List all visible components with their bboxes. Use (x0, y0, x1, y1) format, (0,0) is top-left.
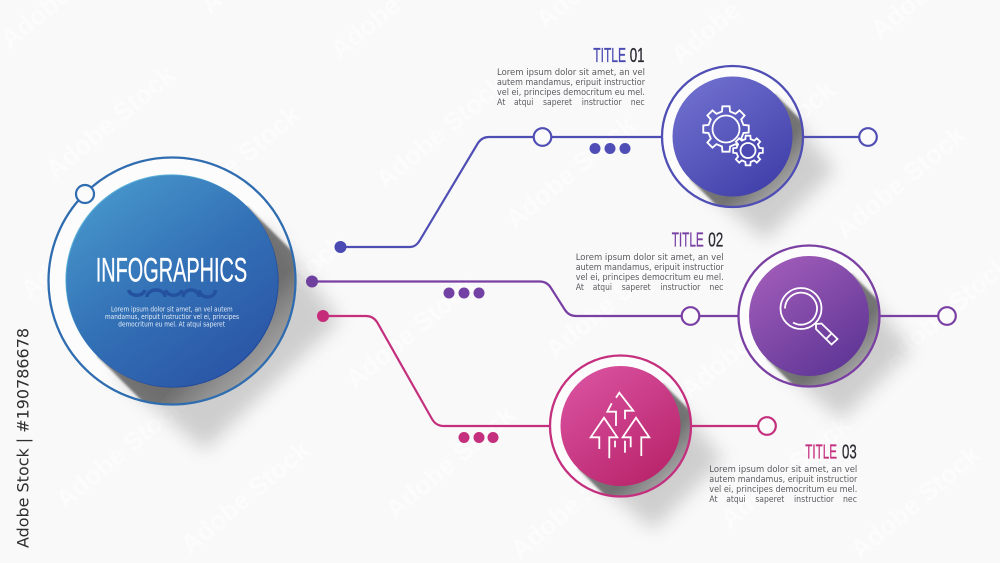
text block 02: saperet (622, 283, 651, 293)
text block 02: vel ei, principes democritum eu mel. (576, 273, 724, 283)
connector line 02 (312, 282, 939, 316)
text block 02: autem mandamus, eripuit instructior (576, 263, 724, 273)
text block 01: atqui (514, 98, 533, 108)
watermark pattern: Adobe Stock (370, 69, 511, 195)
text block 01: autem mandamus, eripuit instructior (497, 78, 645, 88)
title 02: 02 (708, 230, 723, 252)
watermark pattern: Adobe Stock (340, 269, 481, 395)
watermark pattern: Adobe Stock (210, 229, 351, 355)
text block 02 (576, 253, 724, 293)
text block 03: instructior (794, 495, 834, 505)
main body text: Lorem ipsum dolor sit amet, an vel autem (111, 306, 233, 314)
main heading: INFOGRAPHICS (96, 252, 247, 290)
title 01: TITLE (593, 45, 626, 67)
watermark pattern: Adobe Stock (675, 279, 816, 405)
text block 02: nec (709, 283, 724, 293)
text block 01: instructior (582, 98, 622, 108)
long shadow: circle 01 (689, 93, 802, 206)
watermark pattern: Adobe Stock (830, 119, 971, 245)
text block 03: autem mandamus, eripuit instructior (709, 475, 858, 485)
three dots 03 (458, 432, 498, 443)
icon: gears (703, 106, 763, 165)
title 01: 01 (630, 45, 644, 67)
text block 01: vel ei, principes democritum eu mel. (497, 88, 645, 98)
watermark pattern: Adobe Stock (15, 179, 156, 305)
long shadow: circle 03 (577, 382, 690, 496)
circle 03 group (550, 356, 691, 496)
node ring 03 (758, 417, 776, 435)
start dots (306, 241, 346, 322)
text block 02: instructior (660, 283, 701, 293)
text block 01: At (497, 98, 506, 108)
text block 03: nec (843, 495, 857, 505)
watermark pattern: Adobe Stock (50, 389, 191, 515)
main circle group (48, 158, 296, 404)
circle 02 group (738, 246, 880, 386)
text block 02: Lorem ipsum dolor sit amet, an vel (576, 253, 724, 263)
text block 01 (497, 68, 645, 108)
watermark pattern: Adobe Stock (500, 109, 641, 235)
text block 03: atqui (726, 495, 746, 505)
text block 03: At (709, 495, 718, 505)
text block 03: vel ei, principes democritum eu mel. (709, 485, 857, 495)
icon: magnifier (780, 288, 838, 344)
main outer ring (48, 158, 296, 404)
ring 03 (550, 356, 691, 496)
title 03: 03 (842, 441, 857, 463)
text block 01: saperet (543, 98, 572, 108)
connector line 01 (340, 137, 860, 247)
icon: arrows up (591, 393, 649, 458)
circle 01 group (662, 66, 803, 207)
disc 02 (749, 256, 869, 376)
watermark pattern: Adobe Stock (505, 439, 646, 563)
soft shadows outside rings (115, 104, 912, 530)
title 02: TITLE (672, 230, 704, 252)
three dots 02 (444, 288, 484, 298)
watermark pattern: Adobe Stock (165, 99, 306, 225)
watermark pattern: Adobe Stock (540, 239, 681, 365)
main disc (65, 174, 279, 388)
main body text: democritum eu mel. At atqui saperet (118, 320, 225, 328)
text block 02: atqui (593, 283, 612, 293)
stock id text: Adobe Stock | #190786678 (14, 328, 32, 548)
disc 01 (672, 76, 792, 196)
text block 01: nec (631, 98, 645, 108)
main body text (105, 306, 239, 328)
disc 03 (560, 366, 680, 486)
ring 01 (662, 66, 803, 207)
watermark pattern: Adobe Stock (715, 409, 856, 535)
watermark pattern: Adobe Stock (845, 439, 986, 563)
text block 03: Lorem ipsum dolor sit amet, an vel (709, 465, 857, 475)
watermark pattern: Adobe Stock (175, 434, 316, 560)
node rings 02 (682, 307, 956, 325)
connector line 03 (323, 316, 759, 426)
small ring on main circle (76, 185, 94, 203)
wave decoration (128, 290, 216, 297)
ring interiors (48, 66, 880, 496)
text block 03: saperet (755, 495, 785, 505)
text block 02: At (576, 283, 584, 293)
long shadow: circle 02 (766, 272, 878, 386)
main body text: mandamus, eripuit instructior vel ei, principes (105, 313, 239, 321)
watermark pattern: Adobe Stock (40, 59, 181, 185)
watermark pattern: Adobe Stock (380, 399, 521, 525)
text block 01: Lorem ipsum dolor sit amet, an vel (497, 68, 645, 78)
ring 02 (738, 246, 880, 386)
long shadow: main circle (96, 205, 294, 404)
text block 03 (709, 465, 858, 505)
node rings 01 (534, 128, 877, 146)
watermark pattern: Adobe Stock (700, 74, 841, 200)
three dots 01 (590, 143, 630, 154)
title 03: TITLE (805, 441, 837, 463)
